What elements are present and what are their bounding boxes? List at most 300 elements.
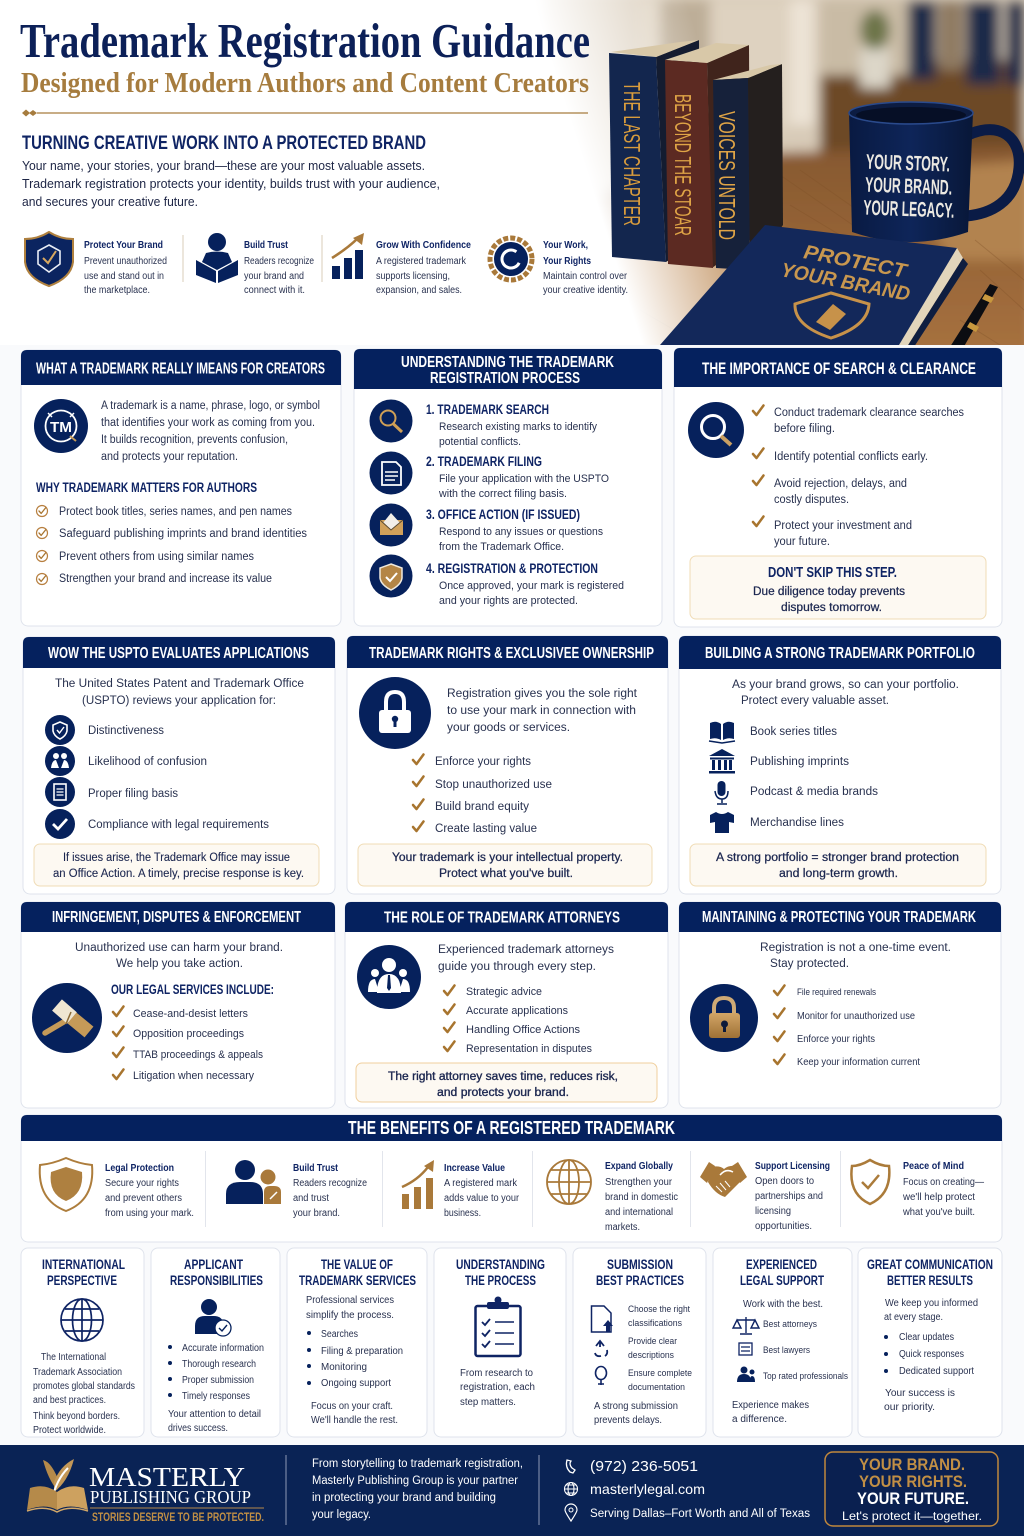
intro text [75,942,283,970]
icon: globe [61,1299,103,1341]
benefit: peace of mind [851,1160,984,1218]
intro text: As your brand grows, so can your portfolio. [732,679,959,691]
card: international perspective: promotes global standards [33,1381,135,1392]
mug: YOUR LEGACY. [863,197,955,223]
pen [951,284,998,345]
feature: build trust: Readers recognize [244,256,314,267]
benefit: build trust [226,1160,367,1219]
feature: grow with confidence: Grow With Confidence [376,239,471,251]
footer message [312,1458,523,1521]
step 1: Research existing marks to identify [439,421,597,433]
card: experienced legal support: LEGAL SUPPORT [740,1273,825,1288]
callout: Your trademark is your intellectual property. [392,852,623,864]
panel header: UNDERSTANDING THE TRADEMARK [401,354,615,371]
criteria list with icons [45,715,269,839]
logo wordmark: PUBLISHING GROUP [90,1487,251,1507]
icon: reader with book [196,233,238,283]
step 4: and your rights are protected. [439,595,578,607]
checklist: Litigation when necessary [133,1070,254,1082]
card: great communication: Your success is [885,1388,955,1399]
contact: location: Serving Dallas–Fort Worth and All of Texas [590,1508,810,1520]
card: value of trademark services: Focus on your craft. [311,1401,393,1412]
panel header [674,348,1002,387]
checklist [774,986,920,1068]
intro text [732,679,959,707]
checklist [113,1006,263,1082]
panel: role of attorneys [345,902,668,1108]
checklist: Stop unauthorized use [435,779,552,791]
panel: benefits of a registered trademark [21,1115,1002,1242]
step 1 [370,400,597,448]
checklist: your future. [774,536,830,548]
benefit: increase value: A registered mark [444,1178,518,1189]
portfolio list with icons: Book series titles [750,726,837,738]
checklist: File required renewals [797,987,876,997]
checklist: Protect book titles, series names, and pen names [59,506,292,518]
benefit: legal protection: from using your mark. [105,1208,194,1219]
intro text: We help you take action. [116,958,243,970]
checklist: Identify potential conflicts early. [774,451,928,463]
card: great communication: Clear updates [899,1332,954,1343]
icon: attorneys [357,945,421,1009]
step 4: 4. REGISTRATION & PROTECTION [426,561,598,576]
feature: protect your brand: Prevent unauthorized [84,256,167,267]
card: applicant responsibilities: Your attention to detail [168,1409,261,1420]
rights text: your goods or services. [447,722,570,734]
card: great communication: our priority. [884,1402,935,1413]
card: international perspective: Think beyond borders. [33,1411,120,1422]
footer message: From storytelling to trademark registration, [312,1458,523,1470]
benefit: expand globally: Expand Globally [605,1160,673,1172]
benefit: legal protection [40,1158,194,1219]
benefit: build trust: Readers recognize [293,1178,367,1189]
icon: growth chart [332,233,364,279]
step 2: with the correct filing basis. [438,488,567,500]
benefit: legal protection: Secure your rights [105,1178,179,1189]
panel: what a trademark really means [21,350,341,626]
card: value of trademark services: THE VALUE OF [321,1257,393,1272]
panel header [23,637,335,668]
card: value of trademark services: simplify the process. [306,1310,394,1321]
intro text: guide you through every step. [438,961,596,973]
card: international perspective: INTERNATIONAL [42,1257,125,1272]
feature: grow with confidence: A registered trademark [376,256,467,267]
subtitle: Designed for Modern Authors and Content Creators [21,68,589,99]
benefit: increase value: Increase Value [444,1162,505,1174]
icon: law book [739,1343,752,1355]
feature: protect your brand [25,232,167,296]
card: great communication: Quick responses [899,1349,964,1360]
benefit: increase value: business. [444,1208,481,1219]
panel header: WOW THE USPTO EVALUATES APPLICATIONS [48,645,309,662]
panel: registration process [354,349,662,626]
panel header [21,902,335,932]
card: experienced legal support: a difference. [732,1414,787,1425]
intro text: and secures your creative future. [22,194,198,209]
card: applicant responsibilities: APPLICANT [184,1257,244,1272]
call-to-action box: YOUR FUTURE. [857,1489,969,1508]
subheading: OUR LEGAL SERVICES INCLUDE: [111,982,274,997]
card: understanding the process: THE PROCESS [465,1273,536,1288]
checklist [753,406,964,548]
notebook: Protect Your Brand: YOUR BRAND [779,259,912,306]
card: great communication [858,1248,1002,1437]
panel header: THE ROLE OF TRADEMARK ATTORNEYS [384,910,620,926]
card: great communication: BETTER RESULTS [887,1273,973,1288]
card: international perspective: PERSPECTIVE [47,1273,117,1288]
notebook: Protect Your Brand: PROTECT [802,241,910,283]
benefit: build trust: your brand. [293,1208,340,1219]
card: international perspective: Trademark Association [33,1367,122,1378]
icon: document upload [592,1306,613,1332]
checklist: Conduct trademark clearance searches [774,407,964,419]
checklist: Handling Office Actions [466,1024,580,1036]
card: submission best practices: documentation [628,1382,685,1392]
rights text: to use your mark in connection with [447,705,636,717]
card: submission best practices: A strong submission [594,1401,678,1412]
step 2 [370,452,609,500]
card: value of trademark services: Filing & preparation [321,1346,403,1357]
benefit: increase value [402,1160,520,1219]
panel: search and clearance [674,348,1002,627]
card: value of trademark services: We'll handle the rest. [311,1415,398,1426]
card: value of trademark services: Professional services [306,1295,394,1306]
card: submission best practices: BEST PRACTICES [596,1273,684,1288]
portfolio list with icons [709,722,878,833]
intro text: Trademark registration protects your identity, builds trust with your audience, [22,176,440,191]
callout: and long-term growth. [779,868,898,880]
card: understanding the process: step matters. [460,1397,516,1408]
panel header: TRADEMARK RIGHTS & EXCLUSIVEE OWNERSHIP [369,645,654,662]
call-to-action box [825,1452,998,1526]
feature: build trust: your brand and [244,271,304,282]
benefit: build trust: Build Trust [293,1162,338,1174]
card: great communication: We keep you informed [885,1298,978,1309]
feature: build trust [196,233,314,296]
benefit: support licensing: Support Licensing [755,1160,830,1172]
icon: person with check [195,1299,231,1336]
portfolio list with icons: Merchandise lines [750,817,844,829]
footer band [0,1445,1024,1536]
card: value of trademark services: Searches [321,1329,358,1340]
benefit: peace of mind: we'll help protect [902,1192,975,1203]
subheading: WHY TRADEMARK MATTERS FOR AUTHORS [36,480,257,495]
icon: padlock [359,677,431,749]
intro text: Unauthorized use can harm your brand. [75,942,283,954]
call-to-action box: Let's protect it—together. [842,1509,982,1523]
benefit: expand globally: markets. [605,1222,640,1233]
card: understanding the process: From research to [460,1368,534,1379]
step 3: 3. OFFICE ACTION (IF ISSUED) [426,507,580,522]
definition text: A trademark is a name, phrase, logo, or symbol [101,400,320,412]
intro text [22,158,440,209]
card: applicant responsibilities: drives success. [168,1423,228,1434]
panel header [679,902,1001,932]
icon: gavel [32,983,102,1053]
footer message: Masterly Publishing Group is your partner [312,1475,518,1487]
hero photo: books, mug and notebook on a desk [557,0,1024,345]
step 2: File your application with the USPTO [439,473,609,485]
checklist [36,506,307,585]
feature: grow with confidence: supports licensing, [376,271,450,282]
benefit: build trust: and trust [293,1193,329,1204]
icon: copyright gear [490,238,532,280]
feature: your work, your rights: Your Rights [543,255,591,267]
card: understanding the process: registration, each [460,1382,535,1393]
logo: book and quill [27,1459,88,1512]
panel header [354,349,662,389]
card: submission best practices: SUBMISSION [607,1257,673,1272]
checklist: Build brand equity [435,801,529,813]
feature: protect your brand: use and stand out in [84,271,164,282]
book: Voices Untold: VOICES UNTOLD [714,111,740,240]
intro text [438,944,614,973]
feature: your work, your rights: Maintain control over [543,271,628,282]
step 3: Respond to any issues or questions [439,526,603,538]
card: international perspective: Protect worldwide. [33,1425,106,1436]
callout [690,844,986,886]
mug: YOUR STORY. [866,151,950,177]
checklist: Create lasting value [435,823,537,835]
criteria list with icons: Proper filing basis [88,788,178,800]
card: international perspective [21,1248,144,1437]
checklist: Monitor for unauthorized use [797,1011,915,1022]
card: applicant responsibilities: RESPONSIBILITIES [170,1273,263,1288]
card: experienced legal support: EXPERIENCED [746,1257,817,1272]
icon: clipboard checklist [476,1296,520,1356]
checklist: costly disputes. [774,494,849,506]
checklist: Keep your information current [797,1057,920,1068]
benefit: support licensing [700,1160,830,1232]
feature: your work, your rights: your creative identity. [543,285,628,296]
step 4 [370,554,624,607]
icon: magnifier [688,402,744,458]
criteria list with icons: Likelihood of confusion [88,756,207,768]
feature: build trust: connect with it. [244,285,305,296]
portfolio list with icons: Podcast & media brands [750,786,878,798]
logo wordmark: STORIES DESERVE TO BE PROTECTED. [92,1510,264,1524]
panel header [345,902,668,932]
card: submission best practices: prevents delays. [594,1415,662,1426]
callout: an Office Action. A timely, precise response is key. [53,868,304,880]
checklist: Opposition proceedings [133,1028,244,1040]
card: applicant responsibilities [151,1248,280,1437]
card: international perspective: The International [41,1352,106,1363]
ornament divider [22,110,588,116]
card: submission best practices: Choose the right [628,1304,690,1314]
card: great communication: Dedicated support [899,1366,974,1377]
intro text [55,678,304,707]
benefit: support licensing: Open doors to [755,1176,814,1187]
panel header: THE BENEFITS OF A REGISTERED TRADEMARK [348,1118,675,1138]
feature: protect your brand: Protect Your Brand [84,239,163,251]
icon: badge [596,1366,606,1385]
book: Beyond the Stoar: BEYOND THE STOAR [670,94,696,236]
card: value of trademark services: TRADEMARK SERVICES [299,1273,416,1288]
intro text [760,942,951,970]
notebook: Protect Your Brand [660,225,968,350]
callout: and protects your brand. [437,1087,569,1099]
checklist: before filing. [774,423,835,435]
icon: TM seal: TM [50,419,72,436]
card: applicant responsibilities: Proper submission [182,1375,254,1386]
benefit: support licensing: partnerships and [755,1191,823,1202]
checklist [444,986,592,1055]
logo wordmark [89,1462,264,1524]
checklist: Strategic advice [466,986,542,998]
book: The Last Chapter [609,40,700,262]
checklist: Safeguard publishing imprints and brand identities [59,528,307,540]
callout [356,1063,657,1102]
contact: phone: (972) 236-5051 [590,1458,698,1475]
benefit: increase value: adds value to your [444,1193,520,1204]
card: experienced legal support: Best lawyers [763,1345,810,1355]
card: submission best practices: descriptions [628,1350,674,1360]
feature: protect your brand: the marketplace. [84,285,150,296]
footer message: your legacy. [312,1509,371,1521]
rights text [447,688,638,734]
definition text: that identifies your work as coming from you. [101,417,315,429]
mug [849,102,1019,242]
feature: grow with confidence: expansion, and sales. [376,285,462,296]
logo wordmark: MASTERLY [89,1462,245,1492]
checklist: Protect your investment and [774,520,912,532]
intro text: The United States Patent and Trademark Office [55,678,304,690]
callout: Due diligence today prevents [753,586,905,598]
intro text: Experienced trademark attorneys [438,944,614,956]
definition text [101,400,320,463]
feature: build trust: Build Trust [244,239,288,251]
card: value of trademark services: Monitoring [321,1362,367,1373]
card: experienced legal support: Top rated professionals [763,1371,848,1381]
benefit: expand globally: and international [605,1207,673,1218]
card: submission best practices: Provide clear [628,1336,677,1346]
icon: TM seal [34,399,88,453]
card: international perspective: and best practices. [33,1395,106,1406]
checklist: Cease-and-desist letters [133,1008,248,1020]
contact: website: masterlylegal.com [590,1481,705,1497]
definition text: and protects your reputation. [101,451,238,463]
benefit: peace of mind: Peace of Mind [903,1160,964,1172]
callout: Protect what you've built. [439,868,573,880]
card: applicant responsibilities: Thorough research [182,1359,256,1370]
panel header [21,350,341,385]
book: Voices Untold [713,64,783,270]
book: Beyond the Stoar [665,43,750,268]
book: The Last Chapter: THE LAST CHAPTER [619,82,645,226]
card: experienced legal support: Work with the best. [743,1299,823,1310]
intro text: Protect every valuable asset. [741,695,889,707]
icon: scales [733,1317,759,1334]
portfolio list with icons: Publishing imprints [750,756,849,768]
checklist: Prevent others from using similar names [59,551,254,563]
icon: shield [25,232,73,286]
benefit: expand globally: Strengthen your [605,1177,673,1188]
panel: how the USPTO evaluates [23,637,335,894]
checklist: Enforce your rights [797,1034,875,1045]
panel header: REGISTRATION PROCESS [430,370,580,387]
step 3 [370,504,603,553]
benefit: expand globally [547,1160,678,1233]
icon: recycle arrows [595,1341,607,1356]
checklist: Accurate applications [466,1005,568,1017]
callout: DON'T SKIP THIS STEP. [768,565,897,581]
icon: professionals [737,1366,755,1382]
card: experienced legal support: Best attorneys [763,1319,817,1329]
step 3: from the Trademark Office. [439,541,564,553]
checklist [413,754,552,835]
feature: your work, your rights: Your Work, [543,239,588,251]
step 4: Once approved, your mark is registered [439,580,624,592]
feature: your work, your rights [490,238,628,296]
checklist: Representation in disputes [466,1043,592,1055]
benefit: expand globally: brand in domestic [605,1192,678,1203]
rights text: Registration gives you the sole right [447,688,638,700]
panel: infringement and enforcement [21,902,335,1108]
card: experienced legal support: Experience makes [732,1400,809,1411]
criteria list with icons: Compliance with legal requirements [88,819,269,831]
footer message: in protecting your brand and building [312,1492,496,1504]
checklist: Strengthen your brand and increase its value [59,573,272,585]
benefit: legal protection: Legal Protection [105,1162,174,1174]
callout [690,556,986,619]
card: great communication: at every stage. [884,1312,943,1323]
card: applicant responsibilities: Timely responses [182,1391,250,1402]
benefit: legal protection: and prevent others [105,1193,182,1204]
panel header [21,1115,1002,1141]
step 1: potential conflicts. [439,436,521,448]
card: applicant responsibilities: Accurate information [182,1343,264,1354]
panel: maintaining your trademark [679,902,1001,1108]
intro text: Your name, your stories, your brand—these are your most valuable assets. [22,158,425,173]
benefit: peace of mind: what you've built. [902,1207,975,1218]
card: experienced legal support [713,1248,852,1437]
icon: gold padlock [690,984,758,1052]
definition text: It builds recognition, prevents confusion, [101,434,288,446]
callout: disputes tomorrow. [781,602,882,614]
callout: The right attorney saves time, reduces risk, [388,1071,618,1083]
card: submission best practices [573,1248,706,1437]
benefit: peace of mind: Focus on creating— [903,1177,984,1188]
call-to-action box: YOUR BRAND. [859,1455,965,1474]
criteria list with icons: Distinctiveness [88,725,164,737]
intro heading: TURNING CREATIVE WORK INTO A PROTECTED BRAND [22,133,426,154]
card: understanding the process [434,1248,566,1437]
intro text: Registration is not a one-time event. [760,942,951,954]
checklist: Enforce your rights [435,756,531,768]
step 1: 1. TRADEMARK SEARCH [426,402,549,417]
benefit: support licensing: licensing [755,1206,791,1217]
step 2: 2. TRADEMARK FILING [426,454,542,469]
callout [358,844,652,886]
panel header [679,636,1001,669]
card: value of trademark services [287,1248,427,1437]
contact: location [565,1504,810,1521]
intro text: (USPTO) reviews your application for: [82,695,276,707]
card: value of trademark services: Ongoing support [321,1378,391,1389]
panel: rights and exclusive ownership [347,636,668,894]
callout: If issues arise, the Trademark Office may issue [63,852,290,864]
intro text: Stay protected. [770,958,849,970]
checklist: Avoid rejection, delays, and [774,478,907,490]
panel header [347,636,668,668]
checklist: TTAB proceedings & appeals [133,1049,263,1061]
panel header: INFRINGEMENT, DISPUTES & ENFORCEMENT [52,909,301,926]
feature: grow with confidence [332,233,471,296]
card: understanding the process: UNDERSTANDING [456,1257,545,1272]
panel header: WHAT A TRADEMARK REALLY IMEANS FOR CREATORS [36,360,325,378]
card: submission best practices: Ensure complete [628,1368,692,1378]
